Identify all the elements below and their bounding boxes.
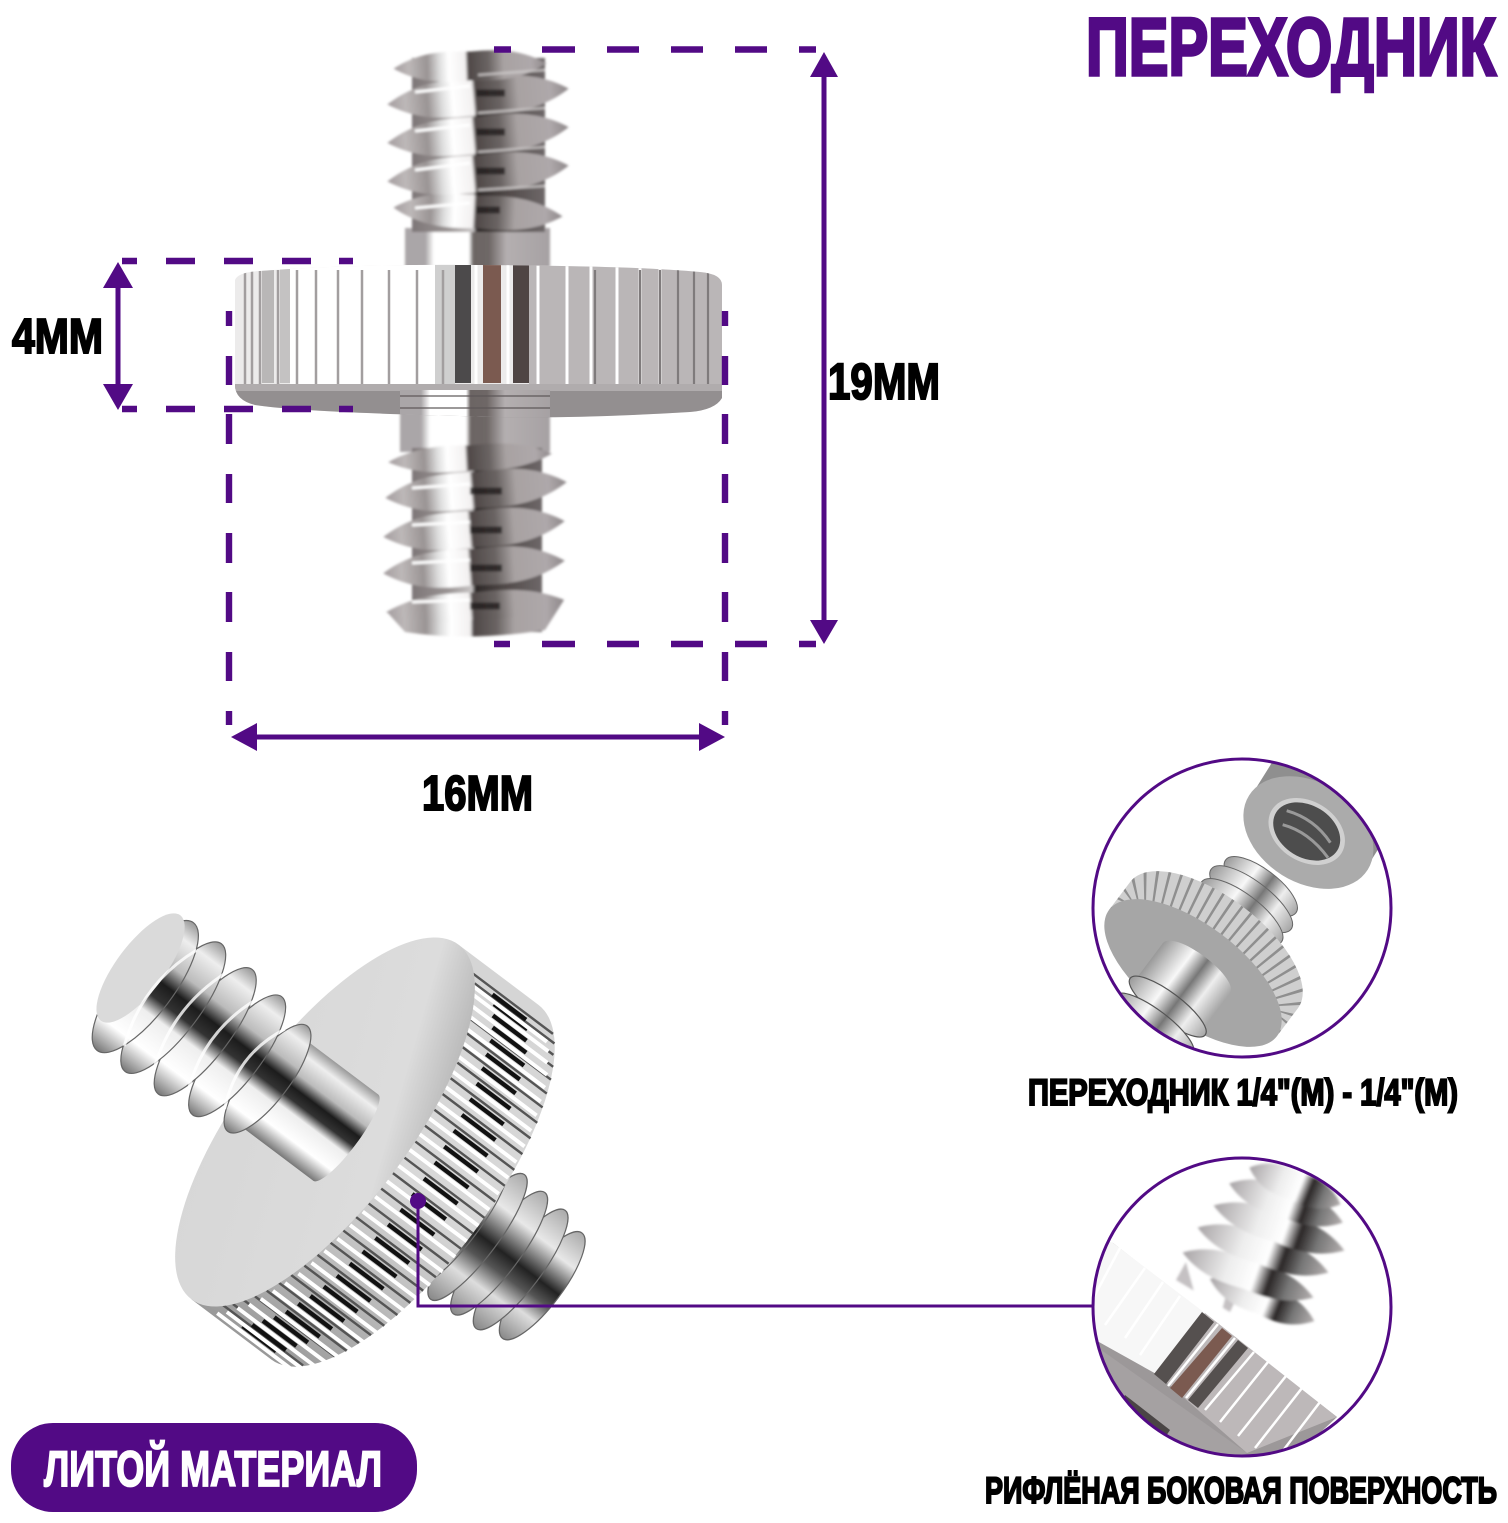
lower shaft and thread: [382, 392, 568, 637]
thread close-up: [1176, 1162, 1345, 1326]
disc face: [124, 894, 526, 1350]
knurled head: [230, 262, 730, 418]
label: 16mm: 16ММ: [422, 767, 533, 821]
knurled rim: [191, 945, 606, 1411]
dimension: 4mm dashed guides: [122, 261, 353, 409]
label: 19mm: 19ММ: [828, 353, 940, 410]
arrow: 16mm: [231, 723, 725, 751]
angled adapter photo: [0, 786, 692, 1475]
badge: cast material: ЛИТОЙ МАТЕРИАЛ: [44, 1440, 382, 1497]
nut: [1243, 764, 1378, 889]
dimension: 16mm dashed guides: [229, 311, 725, 725]
right thread: [396, 1149, 605, 1360]
callout leader line: [410, 1193, 1094, 1306]
left thread: [66, 899, 333, 1156]
detail circle: knurled side: [1092, 1156, 1392, 1458]
badge: cast material: [11, 1423, 417, 1512]
screw: [1104, 856, 1303, 1048]
upper thread: [386, 48, 570, 268]
head band close-up: [1098, 1242, 1337, 1454]
label: 4mm: 4ММ: [12, 310, 103, 364]
front-view adapter photo: [230, 48, 730, 637]
left shaft: [225, 1028, 388, 1188]
arrow: 4mm: [103, 262, 133, 410]
detail circle: adapter and nut: [1092, 758, 1392, 1058]
dimension: 19mm dashed guides: [494, 50, 816, 644]
arrow: 19mm: [810, 52, 838, 644]
